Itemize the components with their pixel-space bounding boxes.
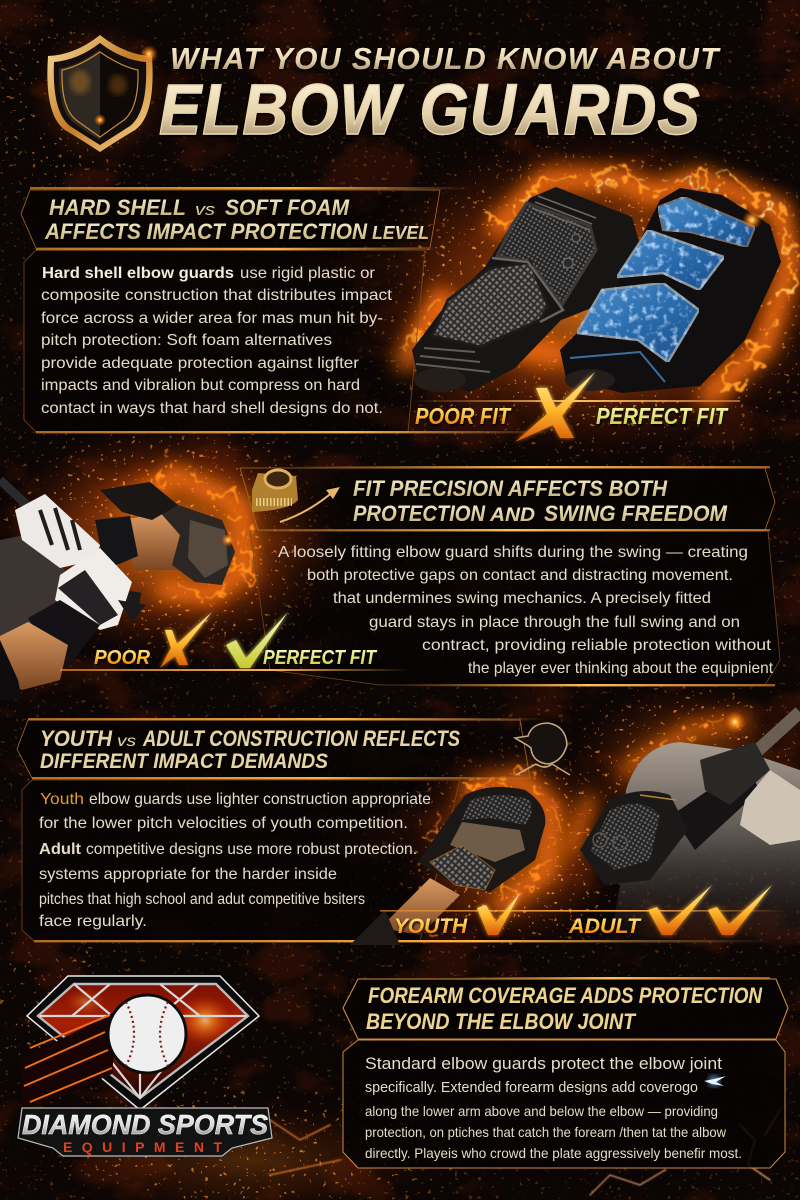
heading: youth vs adult: YOUTH (40, 726, 113, 751)
heading: youth vs adult: ADULT CONSTRUCTION REFLECTS (142, 726, 460, 751)
baseball (108, 995, 186, 1073)
body text (39, 791, 431, 930)
brand tagline: EQUIPMENT (63, 1139, 222, 1155)
icon: check mark (477, 893, 520, 935)
icon: measuring tape and arrow (252, 470, 340, 522)
body text: pitch protection: Soft foam alternatives (41, 332, 332, 349)
image: blue soft foam guard (560, 188, 781, 393)
body text: impacts and vibralion but compress on hard (41, 377, 360, 394)
label: poor fit: POOR FIT (415, 403, 512, 429)
body text: guard stays in place through the full swing and on (369, 614, 740, 631)
brand banner (18, 1108, 272, 1156)
body text: along the lower arm above and below the elbow — providing (365, 1103, 718, 1119)
label: poor: POOR (94, 647, 151, 669)
body text: A loosely fitting elbow guard shifts during the swing — creating (278, 544, 748, 561)
icon: gold shield (28, 20, 172, 170)
panel body (22, 780, 460, 941)
body text: composite construction that distributes impact (41, 287, 393, 304)
image: youth elbow guard (350, 787, 545, 945)
body text: face regularly. (39, 913, 147, 930)
body text: use rigid plastic or (240, 265, 376, 282)
panel body (250, 531, 780, 685)
image: black hard shell guard (412, 187, 645, 392)
body text (278, 544, 774, 677)
heading: hard shell vs soft foam: HARD SHELL (49, 195, 186, 220)
image: batter's arms with gloves and elbow guard (0, 480, 235, 700)
body text: Hard shell elbow guards (42, 265, 234, 282)
flames around guards and arms (130, 175, 795, 1195)
body text: both protective gaps on contact and distracting movement. (307, 567, 733, 584)
logo: diamond sports equipment (18, 976, 272, 1156)
body text: protection, on ptiches that catch the forearn /then tat the albow (365, 1124, 727, 1140)
body text: provide adequate protection against ligfter (41, 355, 360, 372)
heading: hard shell vs soft foam: SOFT FOAM (225, 195, 350, 220)
body text: Standard elbow guards protect the elbow joint (365, 1054, 722, 1073)
heading: hard shell vs soft foam: vs (195, 200, 216, 219)
body text: elbow guards use lighter construction appropriate (89, 791, 431, 808)
heading: forearm coverage: BEYOND THE ELBOW JOINT (366, 1009, 636, 1034)
body text: competitive designs use more robust protection. (86, 841, 417, 858)
heading: youth vs adult: DIFFERENT IMPACT DEMANDS (40, 750, 328, 773)
icon: check mark (708, 885, 772, 935)
icon: check mark (226, 612, 288, 668)
panel: hard shell vs soft foam (21, 187, 781, 442)
heading: hard shell vs soft foam: LEVEL (372, 223, 429, 243)
body text: directly. Playeis who crowd the plate aggressively benefir most. (365, 1145, 742, 1161)
body text: force across a wider area for mas mun hit by- (41, 310, 383, 327)
icon: gold cross (515, 372, 595, 442)
body text (365, 1054, 742, 1161)
body text: contract, providing reliable protection without (422, 637, 772, 654)
body text: Youth (40, 791, 84, 808)
heading: fit precision (353, 476, 728, 526)
diamond emblem (27, 976, 259, 1110)
body text: Adult (39, 841, 82, 858)
title line one: WHAT YOU SHOULD KNOW ABOUT (170, 41, 721, 76)
heading: fit precision: AND (489, 505, 535, 526)
panel: forearm coverage (343, 977, 788, 1168)
body text: systems appropriate for the harder inside (39, 866, 337, 883)
icon: cross (160, 612, 212, 668)
label: perfect fit: PERFECT FIT (263, 647, 378, 669)
heading: youth vs adult: vs (117, 733, 136, 750)
image: adult batter with elbow guard (580, 711, 800, 945)
panel body (24, 250, 425, 432)
heading: fit precision: FIT PRECISION AFFECTS BOTH (353, 476, 668, 501)
heading: hard shell vs soft foam: AFFECTS IMPACT PROTECTION (44, 219, 368, 244)
label: adult: ADULT (568, 915, 642, 938)
icon: check mark (648, 885, 712, 935)
body text: for the lower pitch velocities of youth competition. (39, 815, 408, 832)
title line two: ELBOW GUARDS (159, 71, 701, 150)
heading: forearm coverage (366, 983, 763, 1034)
label: youth: YOUTH (394, 915, 468, 938)
panel: fit precision (0, 466, 780, 700)
heading: youth vs adult (40, 726, 460, 773)
body text: that undermines swing mechanics. A precisely fitted (333, 590, 711, 607)
speed streaks (20, 1010, 118, 1112)
icon: blue spark (704, 1075, 726, 1087)
body text (41, 265, 393, 417)
heading: hard shell vs soft foam (44, 195, 429, 244)
comparison labels (60, 612, 410, 671)
heading: fit precision: SWING FREEDOM (544, 501, 728, 526)
body text: pitches that high school and adut competitive bsiters (39, 891, 365, 908)
comparison labels (380, 885, 790, 938)
panel header frame (21, 190, 440, 248)
panel header frame (343, 979, 788, 1039)
body text: contact in ways that hard shell designs do not. (41, 400, 383, 417)
heading: fit precision: PROTECTION (353, 501, 486, 526)
body text: the player ever thinking about the equipnient (468, 660, 774, 677)
label: perfect fit: PERFECT FIT (596, 403, 729, 429)
body text: specifically. Extended forearm designs add coverogo (365, 1079, 698, 1096)
icon: player head outline (515, 723, 570, 775)
title (159, 41, 721, 150)
brand name: DIAMOND SPORTS (22, 1109, 268, 1140)
panel header frame (240, 468, 775, 530)
panel header frame (17, 720, 530, 778)
panel: youth vs adult (17, 711, 800, 945)
comparison labels (410, 372, 740, 442)
panel body (343, 1040, 785, 1168)
